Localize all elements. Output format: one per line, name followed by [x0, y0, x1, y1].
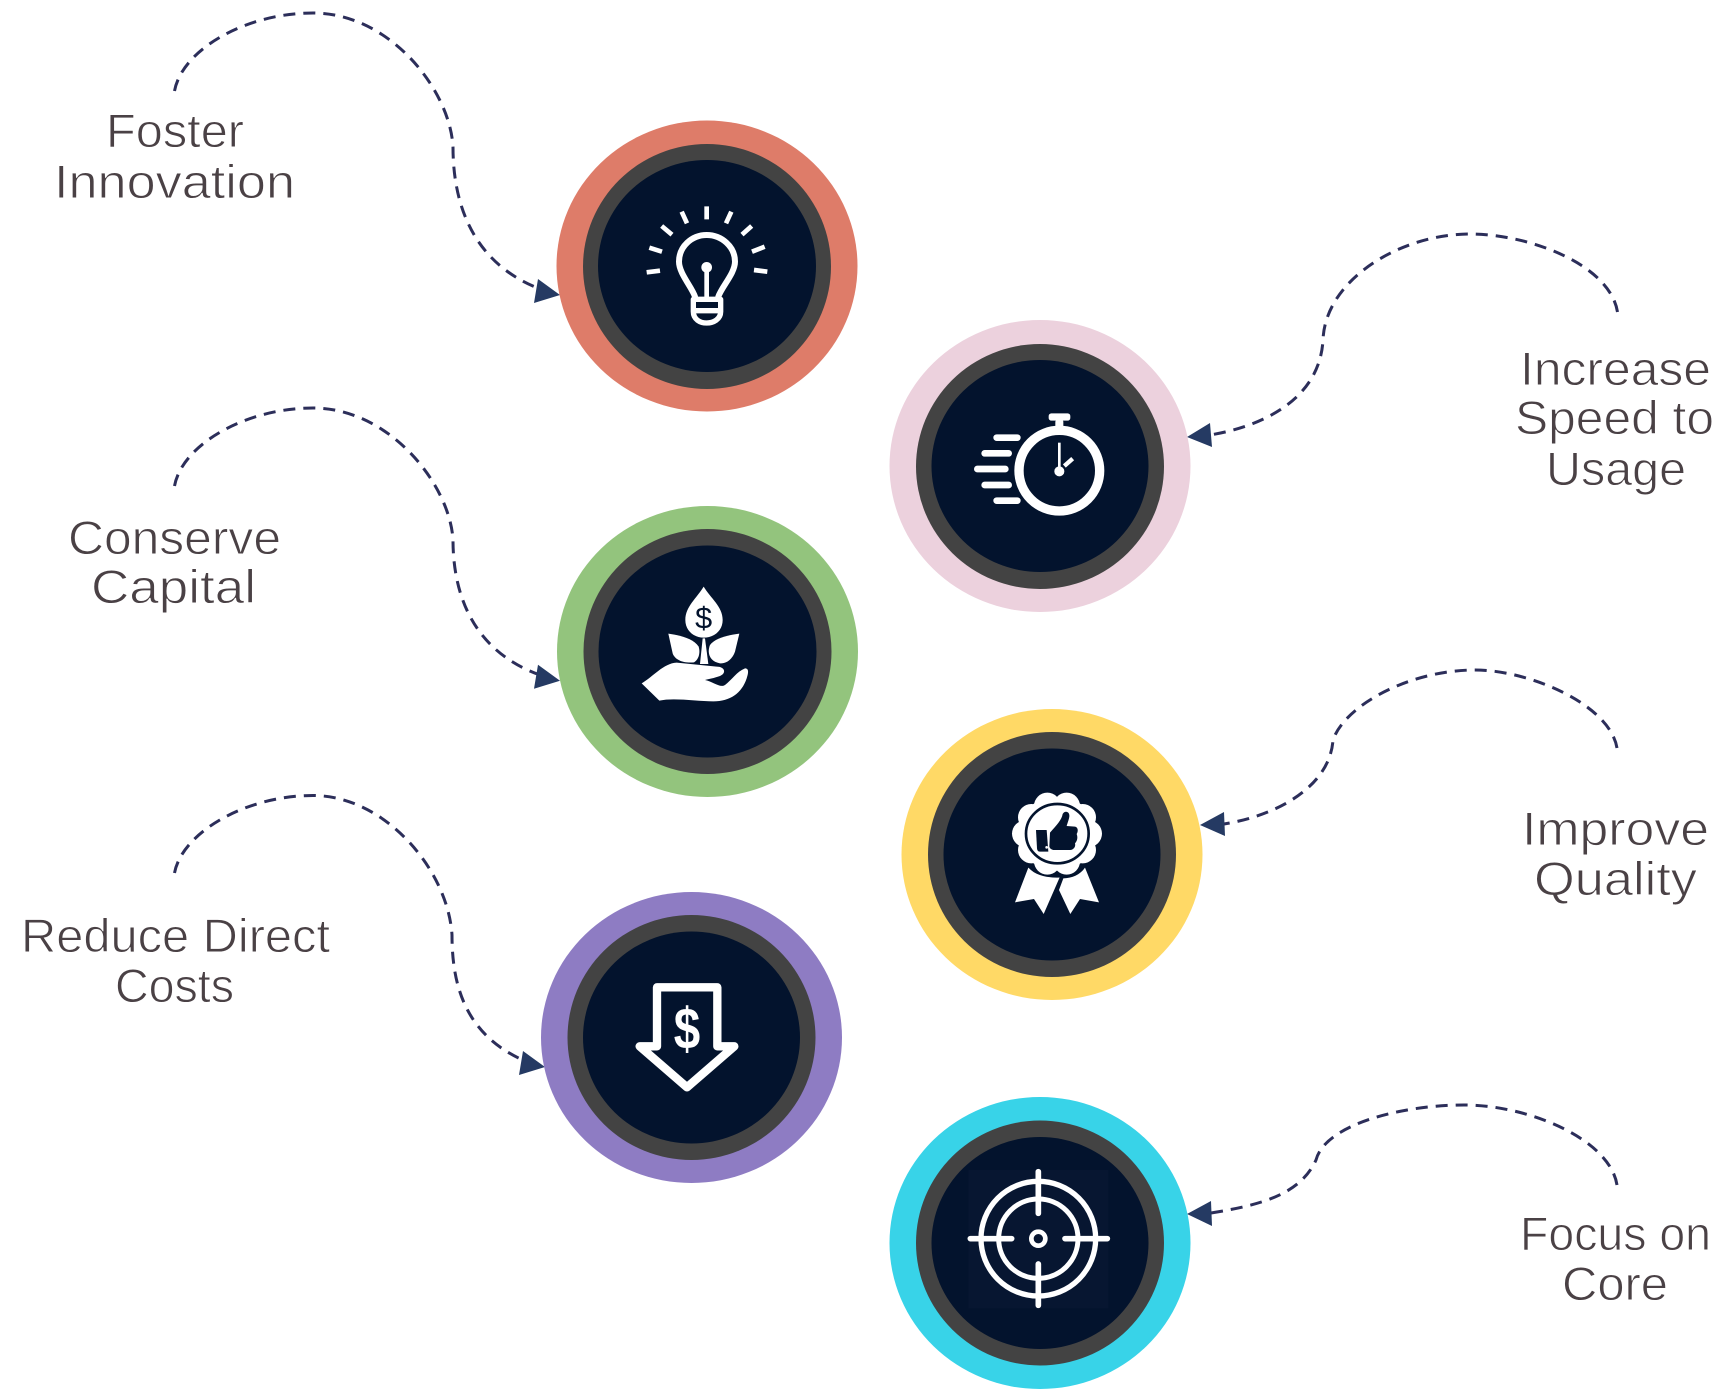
icon: hand holding plant with dollar: $: [695, 602, 712, 636]
label: Improve Quality: Quality: [1534, 852, 1698, 905]
arrow: to Increase Speed to Usage: [1187, 234, 1618, 447]
arrow: to Conserve Capital: [174, 408, 560, 689]
icon: down arrow with dollar: $: [674, 997, 700, 1062]
circle: Reduce Direct Costs: [541, 892, 842, 1183]
label: Conserve Capital: [68, 511, 281, 613]
circle: Increase Speed to Usage: [890, 320, 1190, 612]
arrow: to Focus on Core: [1187, 1105, 1617, 1226]
icon: down arrow with dollar: [640, 987, 734, 1087]
circle: Focus on Core: [890, 1097, 1190, 1389]
icon: stopwatch: [977, 413, 1100, 511]
label: Conserve Capital: Conserve: [68, 511, 281, 564]
label: Foster Innovation: [54, 104, 295, 208]
label: Focus on Core: Core: [1562, 1257, 1668, 1310]
label: Focus on Core: [1520, 1207, 1711, 1310]
label: Increase Speed to Usage: Increase: [1520, 342, 1711, 395]
circle: Foster Innovation: [556, 120, 858, 412]
label: Reduce Direct Costs: [21, 909, 330, 1012]
arrow: to Improve Quality: [1200, 670, 1617, 836]
icon: hand holding plant with dollar: [642, 587, 748, 701]
label: Increase Speed to Usage: Speed to: [1515, 391, 1714, 444]
icon: award rosette with thumbs up: [1012, 793, 1102, 914]
label: Reduce Direct Costs: Costs: [115, 959, 234, 1012]
icon: light bulb: [647, 206, 767, 323]
arrow: to Foster Innovation: [174, 13, 560, 303]
icon: target crosshair: [968, 1170, 1108, 1308]
label: Increase Speed to Usage: [1515, 342, 1714, 495]
label: Reduce Direct Costs: Reduce Direct: [21, 909, 330, 962]
circle: Conserve Capital: [557, 506, 858, 797]
label: Improve Quality: [1522, 802, 1709, 905]
label: Increase Speed to Usage: Usage: [1546, 442, 1686, 495]
label: Focus on Core: Focus on: [1520, 1207, 1711, 1260]
arrow: to Reduce Direct Costs: [174, 796, 545, 1075]
label: Foster Innovation: Innovation: [54, 155, 295, 208]
label: Foster Innovation: Foster: [106, 104, 244, 157]
label: Conserve Capital: Capital: [91, 560, 256, 613]
label: Improve Quality: Improve: [1522, 802, 1709, 855]
circle: Improve Quality: [902, 709, 1202, 1000]
